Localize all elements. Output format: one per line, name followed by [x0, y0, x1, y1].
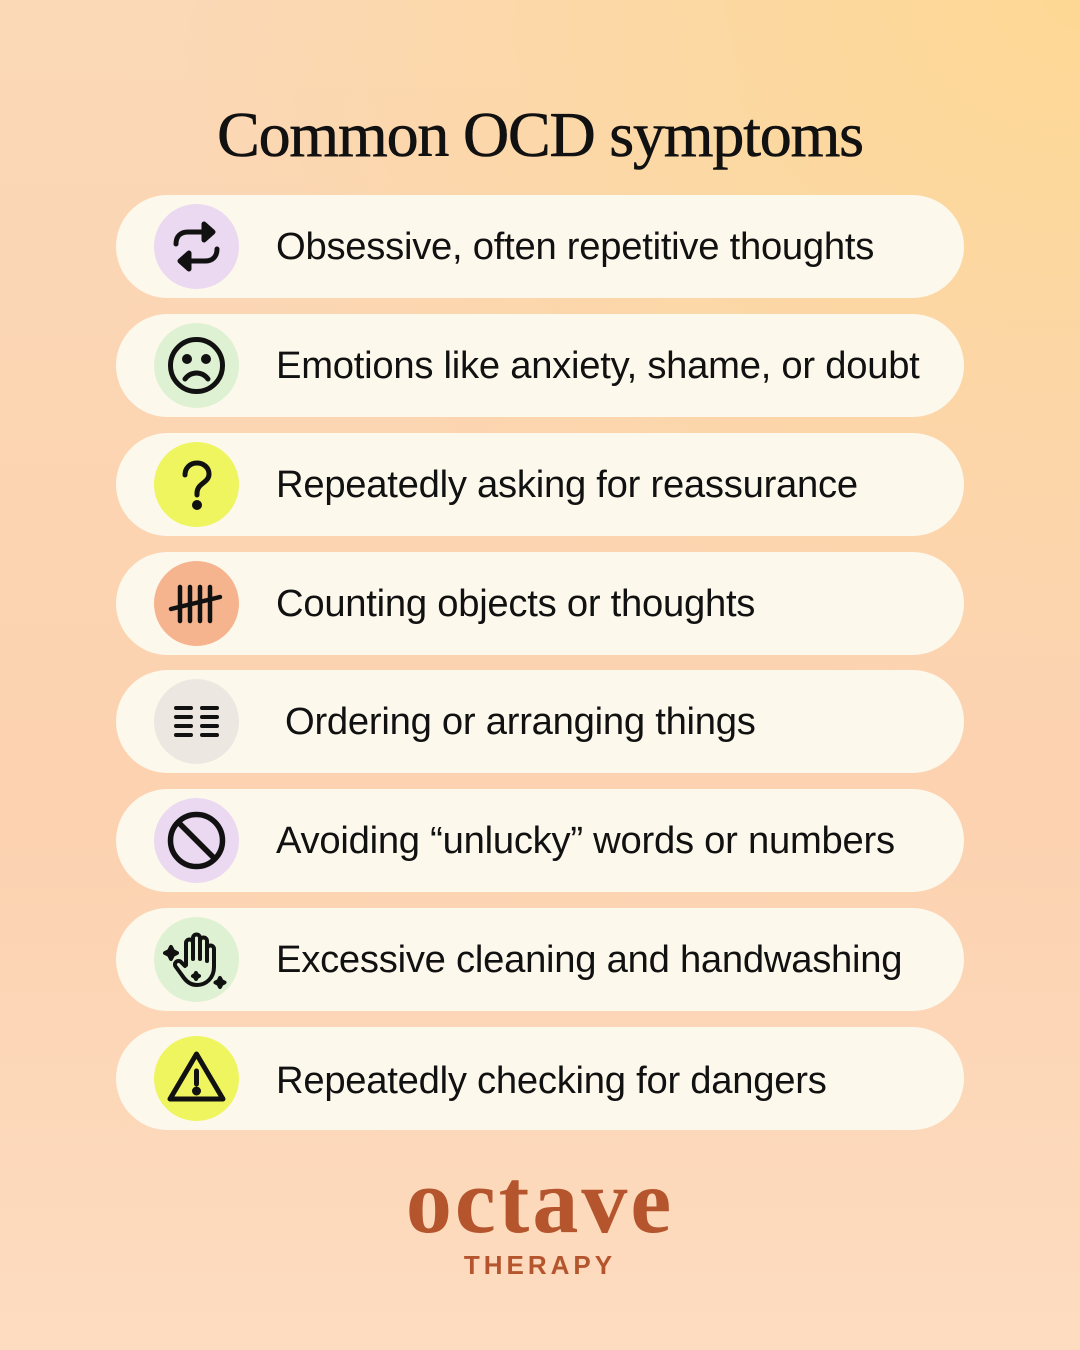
row: avoiding: [116, 789, 964, 892]
icon: tally marks: [154, 561, 239, 646]
icon: list: [154, 679, 239, 764]
icon: sad face: [154, 323, 239, 408]
text: Repeatedly asking for reassurance: [276, 463, 858, 506]
icon: hand with sparkles: [154, 917, 239, 1002]
logo: [406, 1150, 674, 1280]
icon: prohibited: [154, 798, 239, 883]
row: counting: [116, 552, 964, 655]
text: Ordering or arranging things: [285, 700, 756, 743]
icon: question mark: [154, 442, 239, 527]
icon: repeat arrows: [154, 204, 239, 289]
row: checking dangers: [116, 1027, 964, 1130]
text: Counting objects or thoughts: [276, 582, 755, 625]
row: emotions: [116, 314, 964, 417]
text: Repeatedly checking for dangers: [276, 1059, 827, 1102]
row: cleaning: [116, 908, 964, 1011]
logo wordmark: octave: [406, 1150, 674, 1252]
row: ordering: [116, 670, 964, 773]
text: Avoiding “unlucky” words or numbers: [276, 819, 895, 862]
text: Obsessive, often repetitive thoughts: [276, 225, 874, 268]
text: Emotions like anxiety, shame, or doubt: [276, 344, 920, 387]
text: Excessive cleaning and handwashing: [276, 938, 902, 981]
logo subtitle: THERAPY: [464, 1250, 616, 1280]
row: reassurance: [116, 433, 964, 536]
title: Common OCD symptoms: [217, 99, 863, 170]
row: obsessive thoughts: [116, 195, 964, 298]
icon: warning triangle: [154, 1036, 239, 1121]
